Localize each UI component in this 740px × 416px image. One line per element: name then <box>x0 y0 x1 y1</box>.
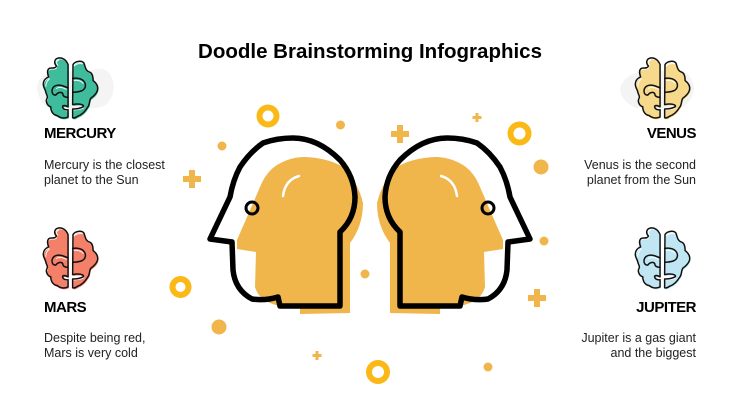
icon: Jupiter brain <box>635 228 690 289</box>
decorative yellow rings <box>172 108 528 381</box>
text: Jupiter description: Jupiter is a gas giant <box>581 331 696 345</box>
text: Mercury description <box>44 158 165 187</box>
text: Jupiter description: and the biggest <box>610 346 696 360</box>
icon: Mars brain <box>43 228 98 289</box>
eye <box>246 202 258 214</box>
text: Venus description: Venus is the second <box>584 158 696 172</box>
text: Jupiter description <box>581 331 696 360</box>
text: Venus description <box>584 158 696 187</box>
heading: Mercury: MERCURY <box>44 125 116 142</box>
head outline <box>385 138 530 306</box>
illustration: left head <box>210 138 363 314</box>
text: Mars description: Despite being red, <box>44 331 145 345</box>
text: Mars description <box>44 331 145 360</box>
highlight <box>283 176 299 196</box>
head fill <box>237 157 363 314</box>
decorative dots <box>212 120 548 372</box>
highlight <box>441 176 457 196</box>
decorative plus signs <box>183 113 546 360</box>
heading: Jupiter: JUPITER <box>636 299 696 316</box>
illustration: right head <box>377 138 530 314</box>
head outline <box>210 138 355 306</box>
heading: Venus: VENUS <box>647 125 696 142</box>
icon: Mercury brain <box>37 58 114 119</box>
text: Mercury description: planet to the Sun <box>44 173 139 187</box>
text: Venus description: planet from the Sun <box>587 173 696 187</box>
heading: Mars: MARS <box>44 299 86 316</box>
head fill <box>377 157 503 314</box>
text: Mercury description: Mercury is the closest <box>44 158 165 172</box>
title: Doodle Brainstorming Infographics <box>198 40 542 63</box>
text: Mars description: Mars is very cold <box>44 346 138 360</box>
eye <box>482 202 494 214</box>
icon: Venus brain <box>620 58 694 119</box>
